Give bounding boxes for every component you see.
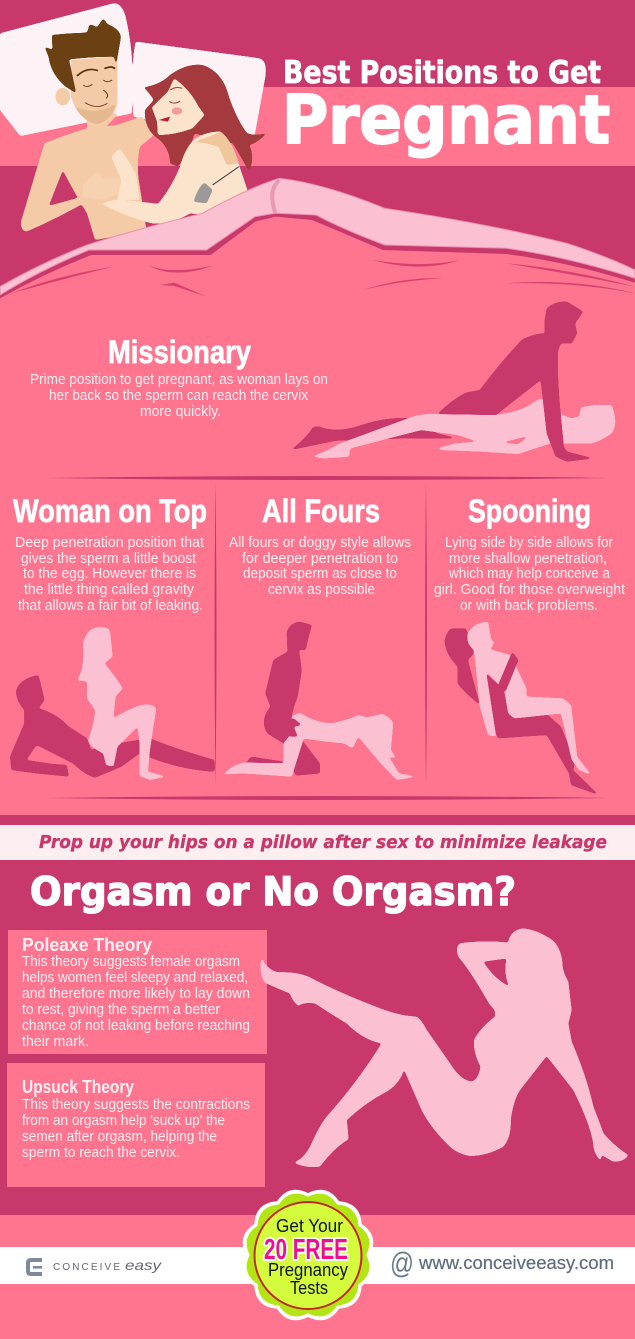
woman on top silhouette (10, 627, 215, 780)
icon: at sign: @ (390, 1247, 414, 1280)
upsuck text: from an orgasm help 'suck up' the (22, 1112, 225, 1129)
badge text: Tests (290, 1277, 328, 1298)
woman on top text (15, 534, 205, 614)
divider top (45, 476, 610, 480)
logo wordmark (53, 1257, 162, 1273)
upsuck text: This theory suggests the contractions (22, 1096, 250, 1113)
divider left (214, 483, 216, 787)
spooning text (434, 534, 626, 614)
woman on top heading: Woman on Top (13, 493, 207, 529)
all fours text (229, 534, 411, 598)
poleaxe heading: Poleaxe Theory (22, 935, 152, 955)
poleaxe text: to rest, giving the sperm a better (22, 1001, 220, 1018)
missionary text: more quickly. (140, 403, 221, 420)
spooning heading: Spooning (468, 493, 591, 529)
header band (0, 87, 635, 166)
man (21, 18, 156, 240)
woman on top text: Deep penetration position that (15, 534, 205, 551)
panel: poleaxe theory (8, 930, 267, 1054)
spooning text: Lying side by side allows for (445, 534, 613, 551)
divider right (425, 483, 427, 787)
spooning text: more shallow penetration, (449, 550, 607, 567)
tip text: Prop up your hips on a pillow after sex to minimize leakage (39, 832, 607, 853)
title line two: Pregnant (282, 81, 610, 159)
badge inner circle (254, 1202, 362, 1309)
woman on top text: to the egg. However there is (23, 565, 196, 582)
all fours heading: All Fours (262, 493, 380, 529)
missionary silhouette (291, 302, 615, 462)
positions panel background (0, 320, 635, 815)
all fours text: cervix as possible (268, 581, 375, 598)
poleaxe text: their mark. (22, 1033, 89, 1050)
bedding (0, 178, 635, 320)
woman on top text: the little thing called gravity (24, 581, 194, 598)
upsuck text: semen after orgasm, helping the (22, 1128, 217, 1145)
badge text: 20 FREE (264, 1234, 348, 1266)
poleaxe text: This theory suggests female orgasm (22, 953, 240, 970)
badge text: Pregnancy (268, 1259, 349, 1280)
missionary heading: Missionary (108, 334, 251, 370)
all fours silhouette (223, 622, 416, 780)
footer white strip (0, 1247, 635, 1284)
all fours text: deposit sperm as close to (243, 565, 397, 582)
woman on top text: gives the sperm a little boost (21, 550, 197, 567)
poleaxe text: and therefore more likely to lay down (22, 985, 250, 1002)
divider bottom (45, 796, 610, 800)
icon: conceive easy logo (28, 1260, 42, 1274)
woman on top text: that allows a fair bit of leaking. (18, 597, 203, 614)
poleaxe text: chance of not leaking before reaching (22, 1017, 250, 1034)
tip strip (0, 825, 635, 860)
footer pink band (0, 1215, 635, 1339)
missionary text: Prime position to get pregnant, as woman lays on (30, 371, 328, 388)
badge green scallop (247, 1194, 369, 1316)
all fours text: for deeper penetration to (242, 550, 398, 567)
missionary text (30, 371, 328, 420)
spooning silhouette (445, 622, 599, 795)
poleaxe text (22, 953, 250, 1050)
badge (243, 1190, 373, 1320)
upsuck text: sperm to reach the cervix. (22, 1144, 180, 1161)
missionary text: her back so the sperm can reach the cervix (49, 387, 308, 404)
pillows (0, 3, 266, 143)
badge outer white scallop (243, 1190, 373, 1320)
reclining woman silhouette (261, 928, 628, 1167)
logo wordmark: easy (125, 1257, 162, 1273)
spooning text: which may help conceive a (448, 565, 611, 582)
bed and couple illustration (0, 3, 635, 320)
website: www.conceiveeasy.com (418, 1252, 614, 1273)
panel: upsuck theory (7, 1063, 265, 1187)
badge text (264, 1215, 349, 1298)
all fours text: All fours or doggy style allows (229, 534, 411, 551)
spooning text: or with back problems. (460, 597, 598, 614)
poleaxe text: helps women feel sleepy and relaxed, (22, 969, 248, 986)
upsuck text (22, 1096, 250, 1161)
orgasm heading: Orgasm or No Orgasm? (30, 870, 516, 915)
woman (101, 65, 267, 224)
logo wordmark: CONCEIVE (53, 1262, 120, 1273)
upsuck heading: Upsuck Theory (22, 1077, 134, 1097)
spooning text: girl. Good for those overweight (434, 581, 626, 598)
badge text: Get Your (276, 1215, 343, 1236)
